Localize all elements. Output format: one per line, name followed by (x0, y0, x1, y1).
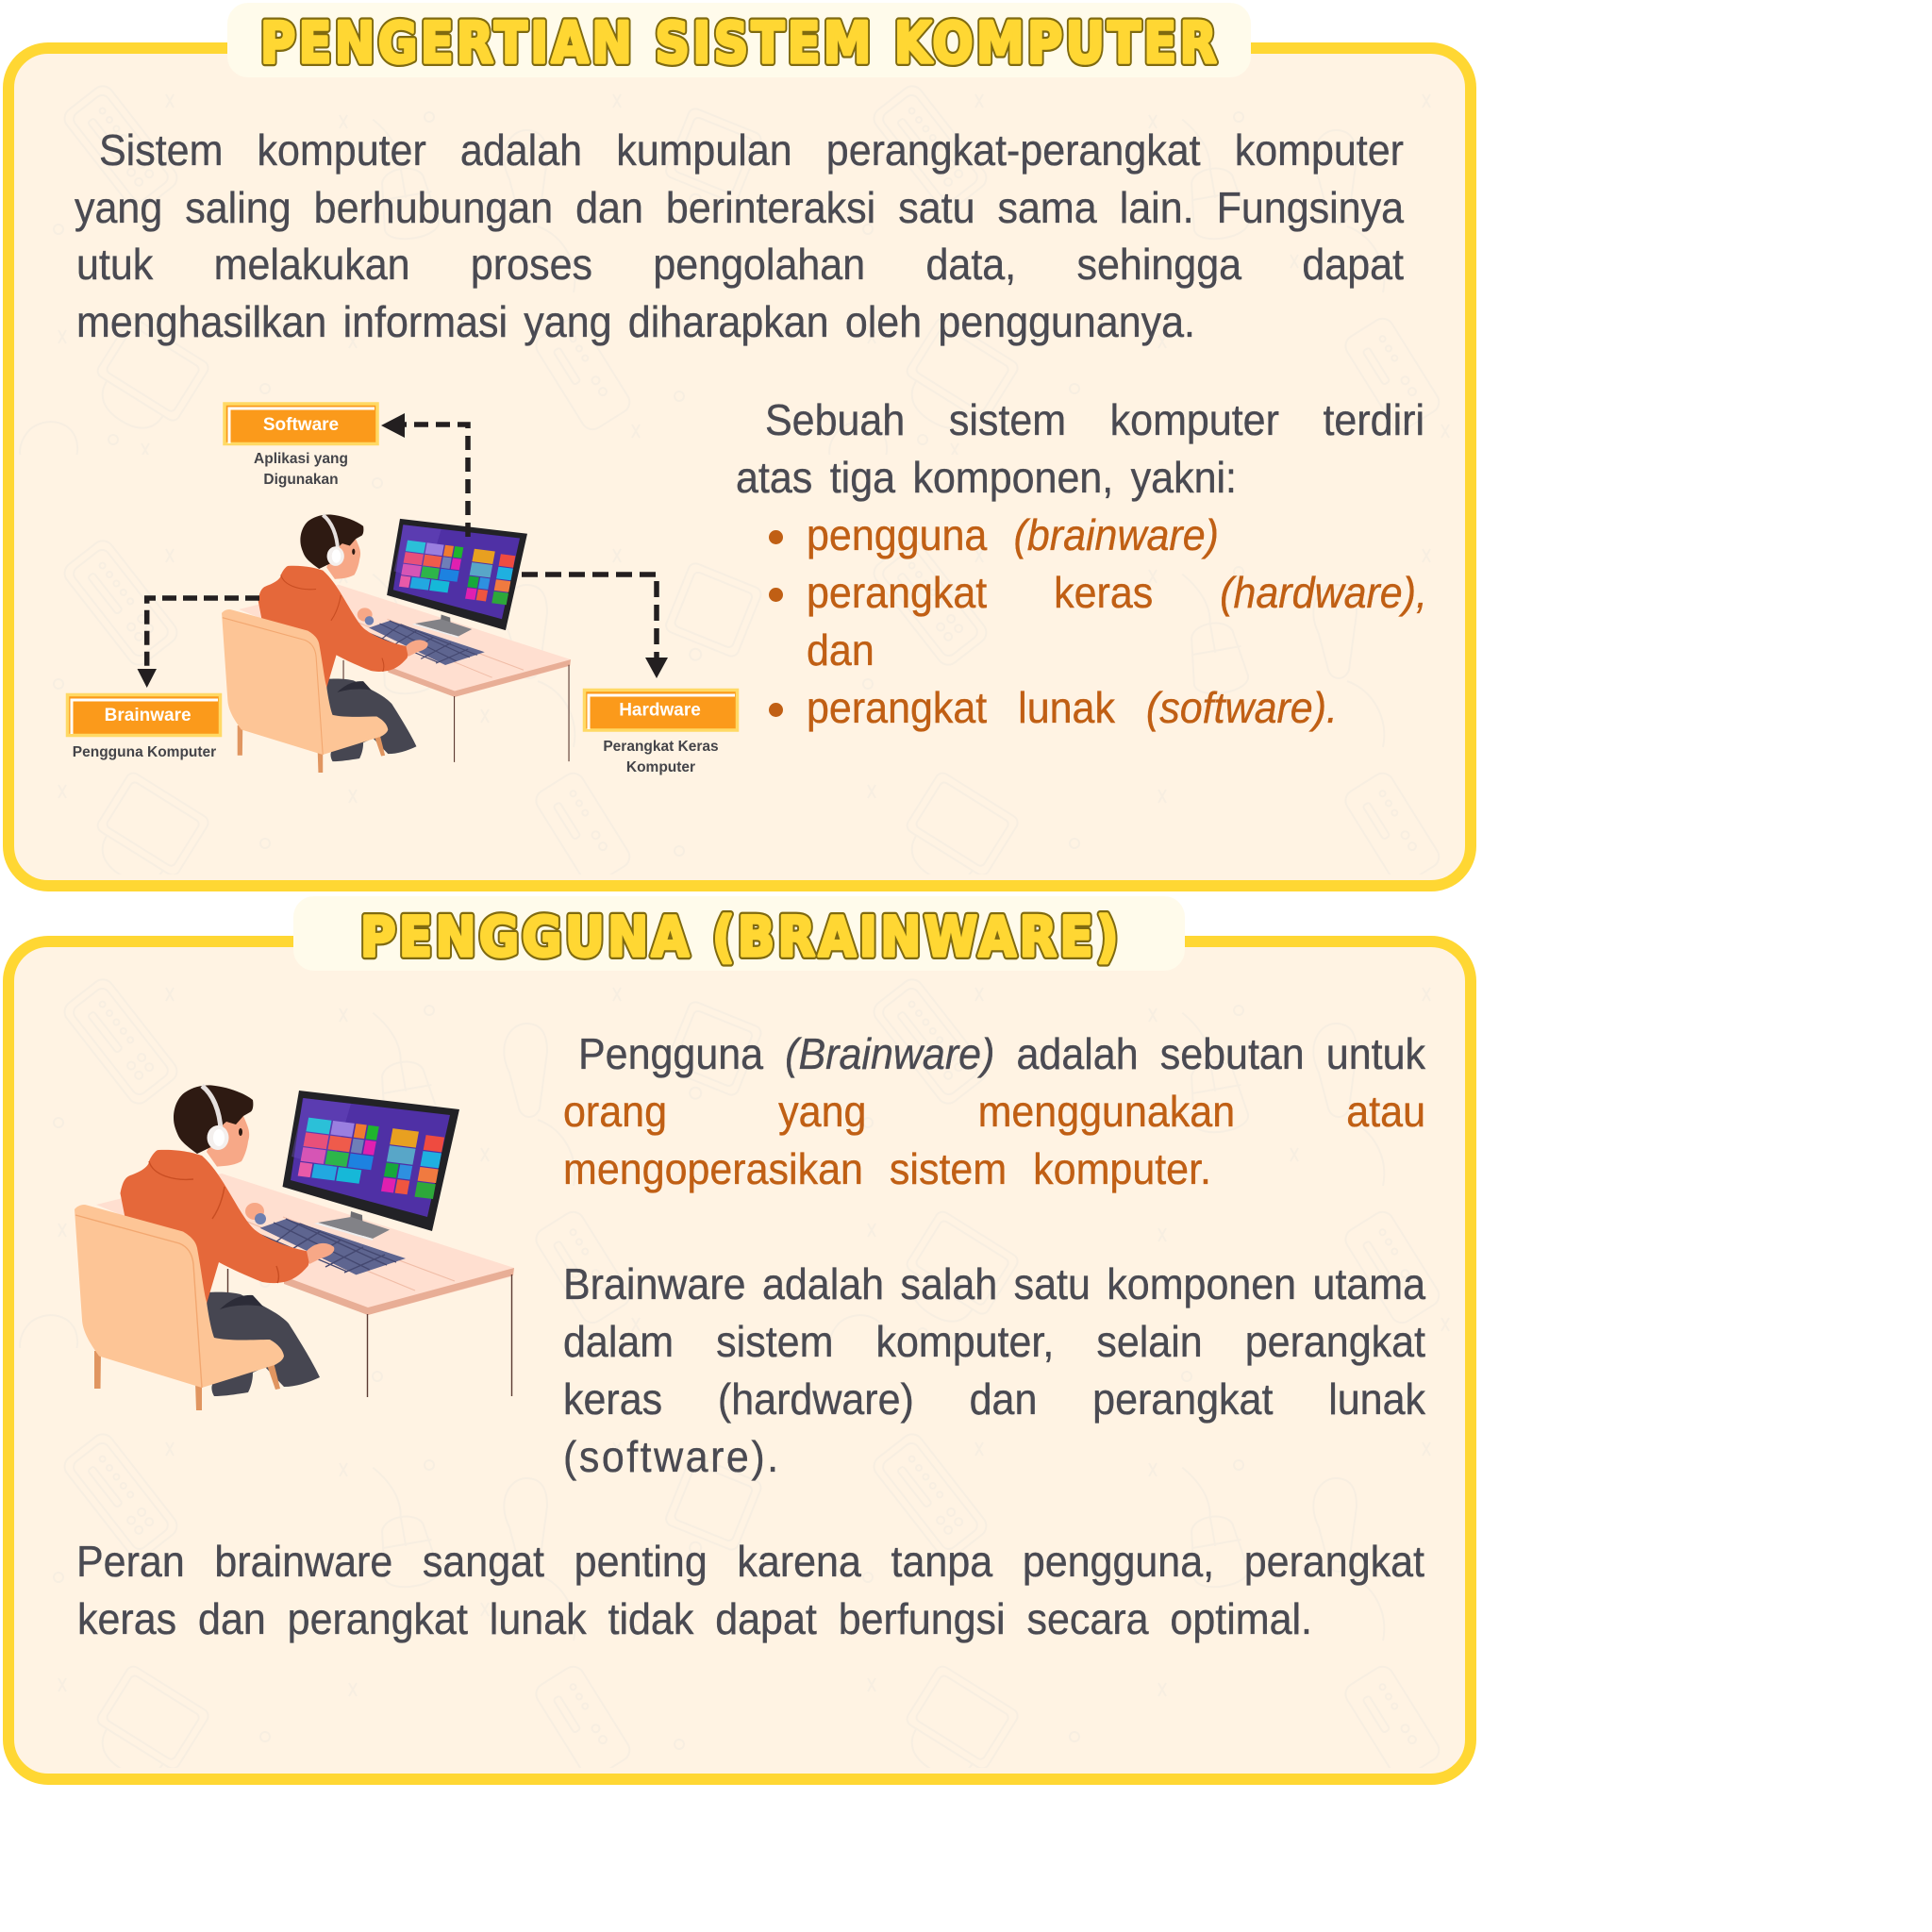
label: hardware (585, 691, 738, 775)
panel frame (3, 936, 1476, 1785)
definition paragraph: Pengguna (Brainware) adalah sebutan untuk (578, 1030, 1425, 1079)
arrow: to software (381, 413, 468, 537)
intro paragraph: utuk melakukan proses pengolahan data, sehingga dapat (76, 241, 1404, 290)
arrow: to brainware (138, 598, 259, 688)
label: brainware (68, 694, 221, 760)
component list: Sebuah sistem komputer terdiri (765, 396, 1424, 445)
label: hardware: Hardware (619, 700, 701, 721)
definition paragraph (563, 1030, 1426, 1194)
component paragraph (563, 1260, 1426, 1482)
illustration: user at computer (222, 514, 571, 773)
intro paragraph (74, 126, 1404, 347)
diagram: komponen sistem komputer (66, 402, 740, 775)
definition paragraph: orang yang menggunakan atau (563, 1088, 1425, 1137)
label: brainware: Brainware (105, 706, 192, 725)
panel: pengguna brainware (3, 896, 1476, 1785)
illustration: user at computer (75, 1084, 514, 1410)
panel frame (3, 42, 1476, 891)
label: software (225, 404, 377, 488)
heading pill (293, 896, 1185, 971)
intro paragraph: yang saling berhubungan dan berinteraksi satu sama lain. Fungsinya (75, 184, 1404, 233)
label: software: Digunakan (263, 472, 339, 488)
label: hardware: Komputer (626, 759, 695, 775)
arrow: to hardware (522, 575, 668, 678)
component paragraph: keras (hardware) dan perangkat lunak (563, 1375, 1425, 1424)
role paragraph: keras dan perangkat lunak tidak dapat berfungsi secara optimal. (77, 1595, 1312, 1644)
intro paragraph: Sistem komputer adalah kumpulan perangkat-perangkat komputer (99, 126, 1404, 175)
component paragraph: (software). (563, 1433, 781, 1482)
component list (736, 396, 1427, 733)
role paragraph: Peran brainware sangat penting karena tanpa pengguna, perangkat (76, 1538, 1424, 1587)
definition paragraph: mengoperasikan sistem komputer. (563, 1145, 1211, 1194)
label: software: Aplikasi yang (254, 451, 348, 467)
intro paragraph: menghasilkan informasi yang diharapkan oleh penggunanya. (76, 298, 1195, 347)
label: hardware: Perangkat Keras (603, 739, 719, 755)
component paragraph: Brainware adalah salah satu komponen utama (563, 1260, 1425, 1309)
panel: pengertian sistem komputer (3, 3, 1476, 891)
component list: perangkat keras (hardware), (807, 569, 1427, 618)
component paragraph: dalam sistem komputer, selain perangkat (563, 1318, 1425, 1367)
label: software: Software (263, 415, 339, 435)
component list: perangkat lunak (software). (807, 684, 1338, 733)
label: brainware: Pengguna Komputer (73, 744, 216, 760)
heading pill (227, 3, 1251, 77)
component list: atas tiga komponen, yakni: (736, 454, 1237, 503)
component list: dan (807, 626, 874, 675)
role paragraph (76, 1538, 1424, 1644)
component list: pengguna (brainware) (807, 511, 1219, 560)
